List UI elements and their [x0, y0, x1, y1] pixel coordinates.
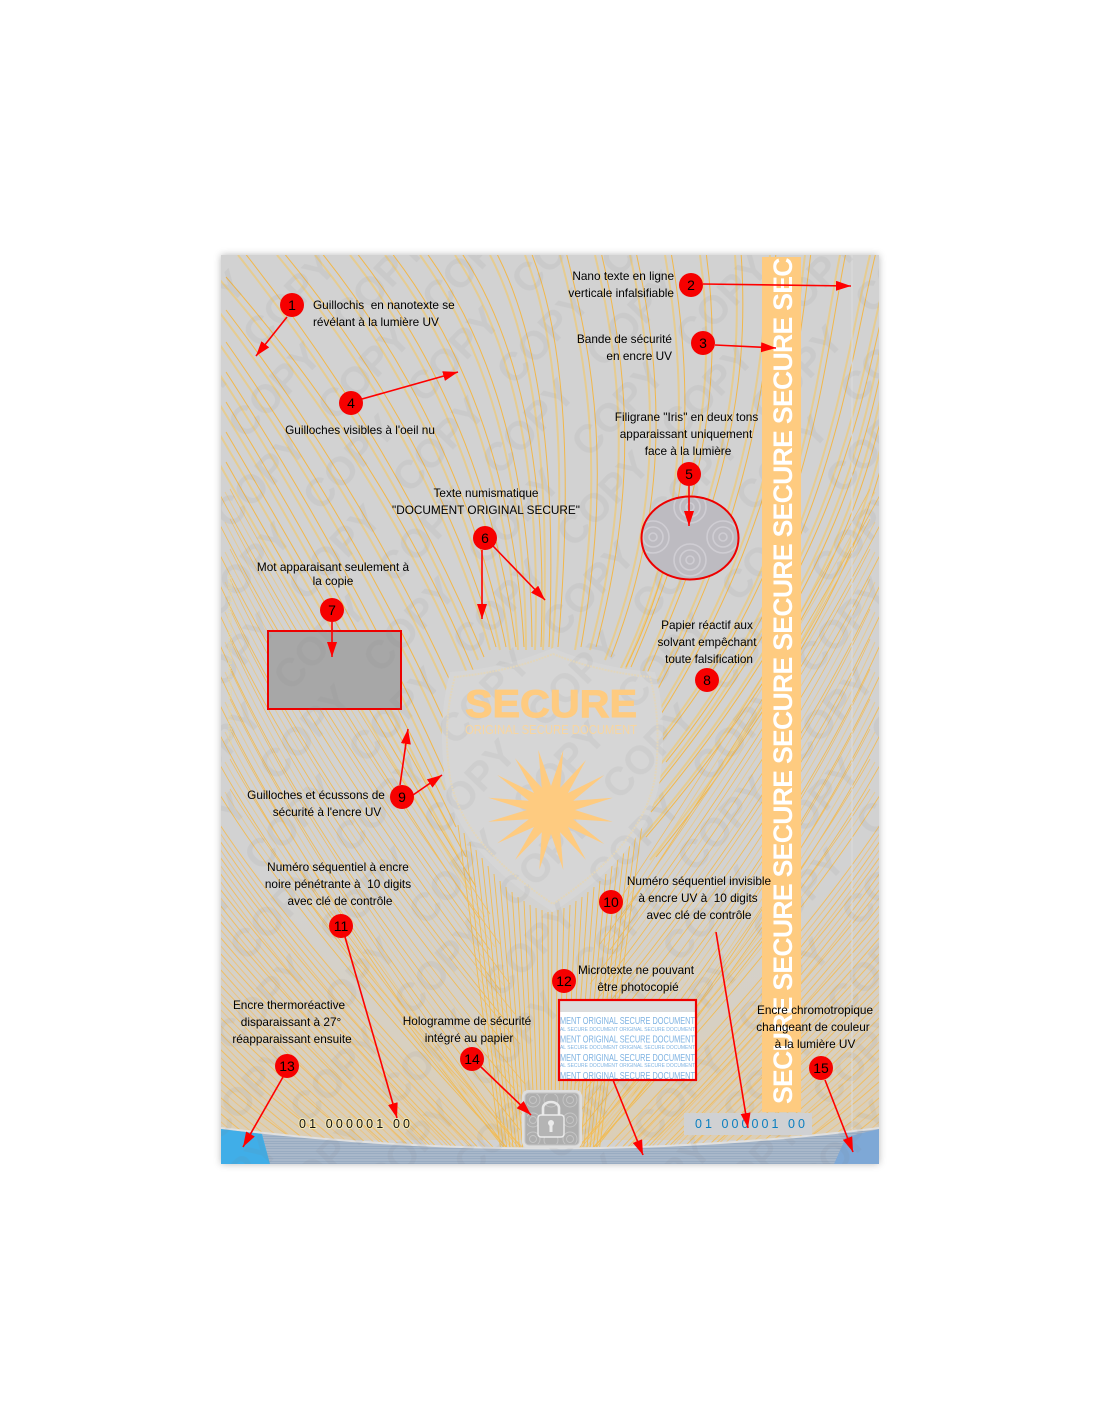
annotation 2: Nano texte en ligne: [572, 269, 674, 283]
annotation 10: avec clé de contrôle: [647, 908, 752, 922]
icon: hologram padlock: [522, 1090, 582, 1148]
UV security strip: SECURE SECURE SECURE SECURE SECURE SECURE SECURE SECURE: [768, 204, 798, 1104]
annotation 4: 4: [347, 395, 355, 411]
microtext box: MENT ORIGINAL SECURE DOCUMENT: [560, 1034, 695, 1046]
annotation 10: à encre UV à 10 digits: [638, 891, 758, 905]
left blue corner: [221, 1129, 270, 1164]
annotation 8: Papier réactif aux: [661, 618, 753, 632]
shield emblem: [447, 654, 658, 904]
annotation 12: 12: [556, 973, 572, 989]
annotation 8: [657, 618, 757, 692]
guilloche lines: [220, 252, 886, 1199]
annotation 6: 6: [481, 530, 489, 546]
annotation 5: [615, 410, 758, 526]
annotation 8: solvant empêchant: [657, 635, 757, 649]
annotation 15: changeant de couleur: [756, 1020, 870, 1034]
iris watermark: [637, 491, 739, 580]
black serial number: 01 000001 00: [299, 1117, 410, 1131]
annotation 8: 8: [703, 672, 711, 688]
annotation 11: Numéro séquentiel à encre: [267, 860, 409, 874]
microtext box: AL SECURE DOCUMENT ORIGINAL SECURE DOCUMENT: [560, 1027, 696, 1033]
copy reveal box: [268, 631, 401, 709]
annotation 4: Guilloches visibles à l'oeil nu: [285, 423, 435, 437]
blue UV serial number: [684, 1113, 812, 1135]
annotation 13: [232, 998, 352, 1147]
COPY watermark: [221, 255, 879, 1164]
microtext box: [559, 1000, 696, 1082]
sun emblem: [488, 750, 613, 870]
annotation 1: [256, 293, 455, 356]
nano text vertical line: SECURITY PAPER · SECURITY PAPER AUTHENTIC · SECURE DOCUMENT: [228, 574, 234, 746]
microtext box: MENT ORIGINAL SECURE DOCUMENT: [560, 1052, 695, 1064]
annotation 6: [392, 486, 580, 619]
annotation 2: verticale infalsifiable: [568, 286, 674, 300]
annotation 5: apparaissant uniquement: [620, 427, 753, 441]
annotation 7: 7: [328, 602, 336, 618]
annotation 13: réapparaissant ensuite: [232, 1032, 352, 1046]
annotation 7: Mot apparaisant seulement à: [257, 560, 410, 574]
annotation 15: Encre chromotropique: [757, 1003, 873, 1017]
annotation 9: Guilloches et écussons de: [247, 788, 385, 802]
annotation 12: être photocopié: [597, 980, 679, 994]
shield background: [442, 648, 663, 866]
annotation 2: [568, 269, 851, 300]
annotation 15: [756, 1003, 873, 1152]
annotation 14: intégré au papier: [425, 1031, 513, 1045]
annotation 14: Hologramme de sécurité: [403, 1014, 532, 1028]
annotation 13: Encre thermoréactive: [233, 998, 345, 1012]
annotation 10: [599, 874, 772, 1128]
annotation 10: 10: [603, 894, 619, 910]
annotation 5: 5: [685, 466, 693, 482]
annotation 1: 1: [288, 297, 296, 313]
panel: secure document: [220, 204, 886, 1199]
annotation 1: Guillochis en nanotexte se: [313, 298, 455, 312]
annotation 3: Bande de sécurité: [577, 332, 672, 346]
annotation 7: [257, 560, 410, 657]
annotation 9: sécurité à l'encre UV: [273, 805, 381, 819]
annotation 8: toute falsification: [665, 652, 753, 666]
annotation 10: Numéro séquentiel invisible: [627, 874, 772, 888]
annotation 14: [403, 1014, 532, 1115]
annotation 11: noire pénétrante à 10 digits: [265, 877, 411, 891]
right blue corner: [834, 1129, 879, 1164]
bottom security band: [221, 1127, 879, 1164]
shield title: SECURE: [465, 683, 637, 726]
annotation 3: [577, 331, 776, 363]
annotation 5: Filigrane "Iris" en deux tons: [615, 410, 758, 424]
annotation 13: disparaissant à 27°: [241, 1015, 342, 1029]
blue UV serial number: 01 000001 00: [695, 1117, 805, 1131]
annotation 3: 3: [699, 335, 707, 351]
annotation 5: face à la lumière: [645, 444, 732, 458]
annotation 12: Microtexte ne pouvant: [578, 963, 695, 977]
annotation 3: en encre UV: [606, 349, 672, 363]
annotation 2: 2: [687, 277, 695, 293]
annotation 6: Texte numismatique: [434, 486, 539, 500]
annotation 4: [285, 372, 458, 437]
annotation 7: la copie: [313, 574, 354, 588]
annotation 9: [247, 729, 442, 819]
annotation 6: "DOCUMENT ORIGINAL SECURE": [392, 503, 580, 517]
annotation 15: à la lumière UV: [775, 1037, 855, 1051]
shield subtitle: ORIGINAL SECURE DOCUMENT: [465, 723, 637, 737]
annotation 1: révélant à la lumière UV: [313, 315, 439, 329]
annotation 15: 15: [813, 1060, 829, 1076]
microtext box: MENT ORIGINAL SECURE DOCUMENT: [560, 1015, 695, 1027]
annotation 14: 14: [464, 1051, 480, 1067]
microtext box: AL SECURE DOCUMENT ORIGINAL SECURE DOCUMENT: [560, 1045, 696, 1051]
annotation 13: 13: [279, 1058, 295, 1074]
annotation 11: 11: [334, 918, 348, 934]
annotation 9: 9: [398, 789, 406, 805]
microtext box: AL SECURE DOCUMENT ORIGINAL SECURE DOCUMENT: [560, 1063, 696, 1069]
annotation 11: [265, 860, 411, 1118]
microtext box: MENT ORIGINAL SECURE DOCUMENT: [560, 1070, 695, 1082]
annotation 11: avec clé de contrôle: [288, 894, 393, 908]
annotation 12: [552, 963, 695, 1155]
